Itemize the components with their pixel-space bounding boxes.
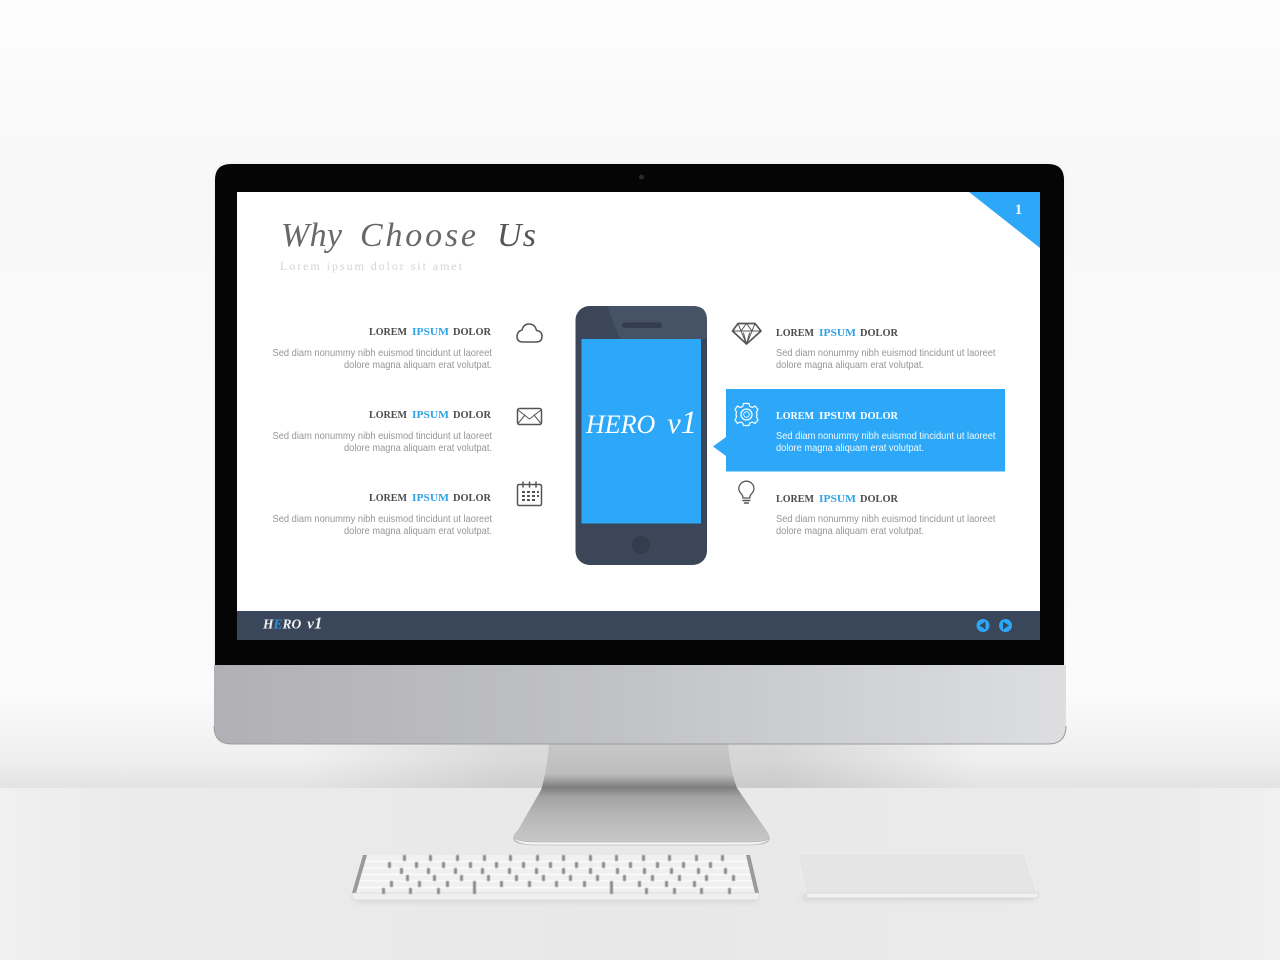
title (281, 217, 536, 254)
right item 1: Sed diam nonummy nibh euismod tincidunt ut laoreet (776, 348, 996, 359)
phone home button (632, 536, 650, 554)
slide background (237, 192, 1040, 611)
monitor (213, 162, 1066, 744)
monitor stand (513, 744, 770, 845)
phone sheen (607, 306, 707, 339)
phone screen label: HERO v1 (585, 405, 697, 441)
left item 2: IPSUM (412, 409, 450, 421)
trackpad (797, 853, 1038, 900)
callout heading: IPSUM (819, 410, 857, 422)
phone screen (582, 339, 701, 524)
callout text line 1: Sed diam nonummy nibh euismod tincidunt ut laoreet (776, 431, 996, 442)
keyboard right edge (746, 855, 759, 893)
right item 3: dolore magna aliquam erat volutpat. (776, 526, 924, 537)
left item 3: IPSUM (412, 492, 450, 504)
callout heading: LOREM (776, 410, 815, 422)
left item 3: LOREM (369, 492, 408, 504)
left item 2: dolore magna aliquam erat volutpat. (344, 443, 492, 454)
footer bar (237, 611, 1040, 640)
left item 3: dolore magna aliquam erat volutpat. (344, 526, 492, 537)
monitor black bezel (215, 164, 1064, 665)
callout text line 2: dolore magna aliquam erat volutpat. (776, 443, 924, 454)
left item 1: DOLOR (453, 326, 492, 338)
callout heading: DOLOR (860, 410, 899, 422)
right item 3: DOLOR (860, 493, 899, 505)
keyboard base edge (352, 893, 759, 900)
right item 1: IPSUM (819, 327, 857, 339)
left item 2: LOREM (369, 409, 408, 421)
right item 3: Sed diam nonummy nibh euismod tincidunt ut laoreet (776, 514, 996, 525)
trackpad edge (806, 893, 1038, 898)
right item 3: IPSUM (819, 493, 857, 505)
nav button: next (999, 619, 1012, 632)
right item 1 (776, 327, 996, 371)
camera (639, 174, 644, 180)
keyboard shadow (356, 897, 756, 902)
left item 1: dolore magna aliquam erat volutpat. (344, 360, 492, 371)
left item 2 (272, 409, 492, 454)
left item 3: DOLOR (453, 492, 492, 504)
callout box (713, 389, 1005, 472)
right item 1: dolore magna aliquam erat volutpat. (776, 360, 924, 371)
phone body (576, 306, 707, 565)
icon: light bulb (739, 481, 754, 503)
left item 1: IPSUM (412, 326, 450, 338)
right item 1: DOLOR (860, 327, 899, 339)
title: Why (281, 217, 343, 254)
left item 1 (272, 326, 492, 371)
background: desk (0, 788, 1280, 960)
title: Choose (360, 217, 476, 254)
callout heading (776, 410, 899, 422)
icon: diamond (732, 324, 761, 344)
left item 1: Sed diam nonummy nibh euismod tincidunt ut laoreet (272, 348, 492, 359)
icon: cloud (517, 324, 542, 342)
stand foot edge (514, 838, 770, 845)
icon: envelope (518, 408, 542, 424)
corner ribbon: 1 (1015, 202, 1022, 218)
callout: highlighted item (713, 389, 1005, 472)
left item 3 (272, 492, 492, 537)
right item 1: LOREM (776, 327, 815, 339)
wall shadow under monitor (300, 744, 980, 788)
keyboard (352, 855, 759, 902)
left item 3: Sed diam nonummy nibh euismod tincidunt ut laoreet (272, 514, 492, 525)
right item 3 (776, 493, 996, 537)
stand body (513, 744, 770, 845)
left item 2: Sed diam nonummy nibh euismod tincidunt ut laoreet (272, 431, 492, 442)
right item 3: LOREM (776, 493, 815, 505)
corner ribbon (969, 192, 1040, 248)
phone speaker (622, 322, 662, 328)
nav button: previous (976, 619, 990, 632)
keyboard key gaps (382, 855, 735, 894)
trackpad shadow (802, 895, 1034, 900)
trackpad surface (797, 853, 1037, 893)
keyboard left edge (352, 855, 367, 893)
icon: calendar (518, 482, 542, 506)
icon: gear (735, 404, 758, 426)
subtitle: Lorem ipsum dolor sit amet (280, 259, 463, 273)
phone (576, 306, 707, 565)
title: Us (497, 217, 536, 254)
keyboard keys plate (353, 855, 758, 893)
keyboard row lines (355, 862, 756, 888)
monitor chin (214, 665, 1066, 744)
monitor bezel outline (213, 162, 1066, 665)
left item 2: DOLOR (453, 409, 492, 421)
footer logo: HERO v1 (262, 614, 322, 632)
slide (237, 192, 1040, 640)
monitor chin bottom edge (214, 726, 1066, 744)
left item 1: LOREM (369, 326, 408, 338)
